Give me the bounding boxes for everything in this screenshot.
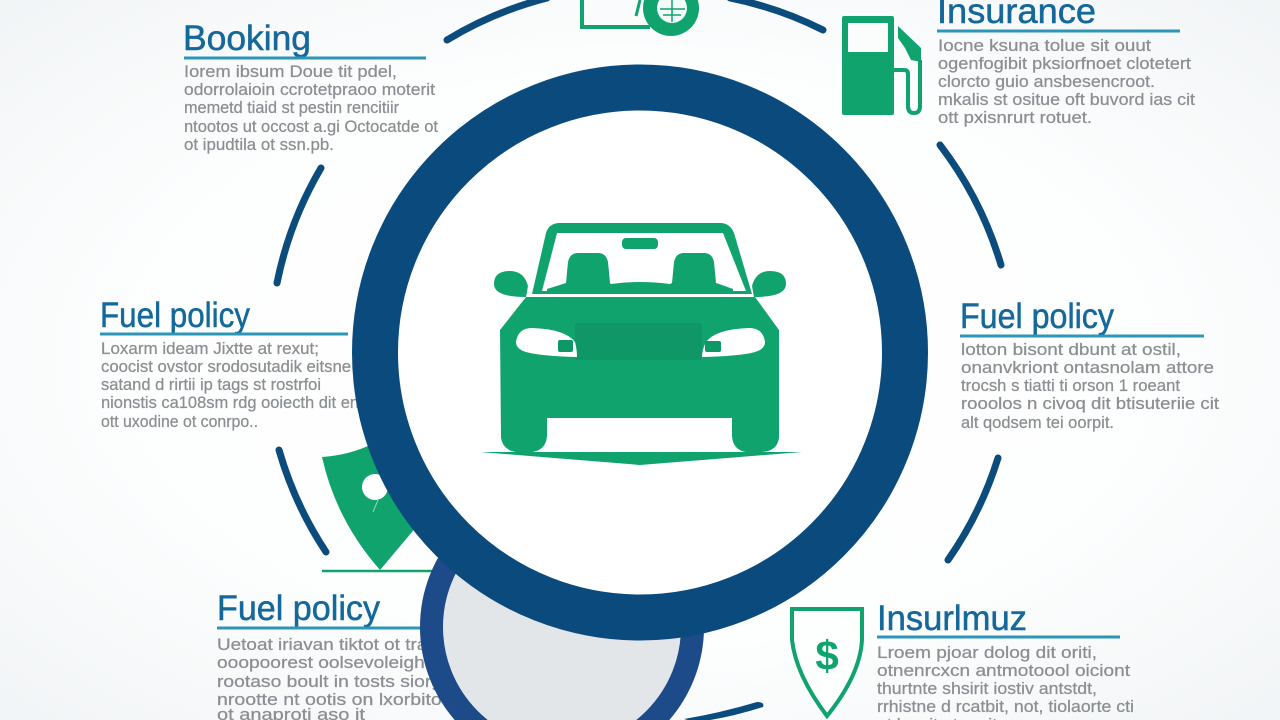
car grille (575, 323, 702, 360)
magnifier lens (432, 496, 692, 720)
panel: booking: Iorem ibsum Doue tit pdel, (184, 63, 397, 81)
panel: fuel policy right: trocsh s tiatti ti orson 1 roeant (961, 377, 1180, 395)
panel: insurance bottom: Lroem pjoar dolog dit oriti, (877, 644, 1097, 662)
panel: fuel policy left: Fuel policy (100, 296, 250, 335)
panel: booking: ntootos ut occost a.gi Octocatde ot (184, 118, 438, 136)
panel: booking (183, 19, 438, 154)
car left mirror (494, 271, 528, 297)
panel: fuel policy bottom: Fuel policy (217, 589, 380, 628)
panel: insurance bottom: thurtnte shsirit iostiv antstdt, (877, 680, 1097, 698)
panel: insurance: Iocne ksuna tolue sit ouut (938, 37, 1151, 55)
car windshield frame (532, 223, 752, 294)
panel: insurance bottom (877, 599, 1134, 720)
panel: fuel policy bottom: ooopoorest oolsevoleighuy (217, 654, 446, 672)
panel: fuel policy bottom (217, 589, 457, 720)
car body (500, 297, 779, 452)
icon: left shield (322, 444, 436, 571)
panel: fuel policy bottom: rootaso boult in tosts siorgin (217, 673, 457, 691)
panel: booking: ot ipudtila ot ssn.pb. (184, 136, 334, 154)
panel: insurance: clorcto guio ansbesencroot. (938, 73, 1155, 91)
panel: fuel policy left: Loxarm ideam Jixtte at rexut; (101, 340, 319, 358)
car ground shadow (480, 452, 802, 465)
icon: car front view (480, 223, 802, 465)
icon: dollar shield (792, 609, 862, 716)
icon: booking document and globe (582, 0, 699, 36)
panel: fuel policy right: Fuel policy (960, 297, 1114, 336)
panel: insurance: ott pxisnrurt rotuet. (938, 109, 1092, 127)
panel: fuel policy right: lotton bisont dbunt at ostil, (961, 341, 1181, 359)
panel: fuel policy left: satand d rirtii ip tags st rostrfoi (101, 376, 321, 394)
panel: insurance (937, 0, 1195, 127)
panel: booking: memetd tiaid st pestin rencitiir (184, 99, 399, 117)
car rear-view mirror (622, 238, 658, 249)
car seats and dashboard (547, 253, 733, 291)
panel: fuel policy left: ott uxodine ot conrpo.. (101, 413, 258, 431)
panel: insurance: mkalis st ositue oft buvord ias cit (938, 91, 1195, 109)
main navy ring (375, 88, 905, 618)
outer segmented ring (277, 0, 1001, 720)
icon: dollar shield: $ (815, 632, 839, 679)
panel: fuel policy right: onanvkriont ontasnolam attore (961, 359, 1214, 377)
panel: fuel policy right (960, 297, 1219, 432)
panel: booking: Booking (183, 19, 311, 58)
car right headlight (702, 328, 765, 357)
panel: insurance bottom: Insurlmuz (877, 599, 1027, 638)
panel: insurance bottom: rrhistne d rcatbit, not, tiolaorte cti (877, 698, 1134, 716)
panel: booking: odorrolaioin ccrotetpraoo moterit (184, 81, 435, 99)
panel: insurance: ogenfogibit pksiorfnoet clotetert (938, 55, 1191, 73)
panel: fuel policy left: coocist ovstor srodosutadik eitsne (101, 358, 351, 376)
panel: fuel policy bottom: nrootte nt ootis on lxorbito it (217, 691, 457, 709)
panel: fuel policy right: alt qodsem tei oorpit. (961, 414, 1114, 432)
panel: fuel policy right: rooolos n civoq dit btisuteriie cit (961, 395, 1219, 413)
panel: fuel policy left: nionstis ca108sm rdg ooiecth dit en (101, 394, 359, 412)
panel: fuel policy left (100, 296, 359, 431)
car right mirror (752, 271, 786, 297)
icon: fuel pump (842, 16, 921, 115)
car left headlight (516, 328, 577, 357)
panel: insurance bottom: otnenrcxcn antmotoool oiciont (877, 662, 1130, 680)
panel: fuel policy bottom: Uetoat iriavan tiktot ot trani (217, 636, 442, 654)
